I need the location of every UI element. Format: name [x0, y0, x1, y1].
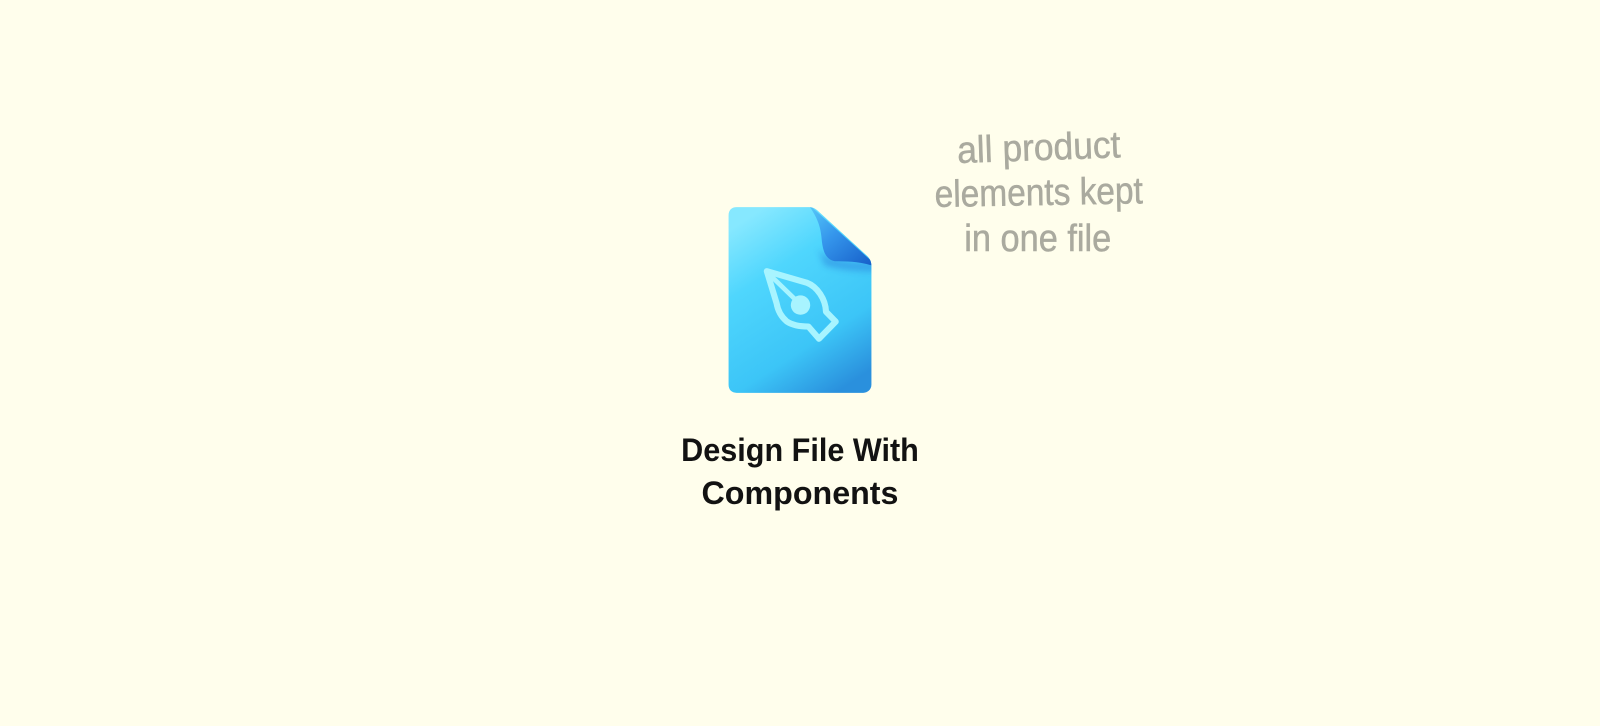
file body [729, 207, 871, 393]
note line 3: in one file [964, 217, 1111, 259]
title line 2: Components [702, 475, 898, 511]
file title [681, 432, 919, 511]
icon: blue design file with pen nib [729, 202, 880, 393]
folded corner [810, 207, 872, 274]
pen nib symbol [767, 271, 836, 339]
handwritten note [934, 123, 1144, 259]
note line 1: all product [956, 123, 1122, 171]
title line 1: Design File With [681, 432, 919, 468]
note line 2: elements kept [934, 169, 1144, 215]
